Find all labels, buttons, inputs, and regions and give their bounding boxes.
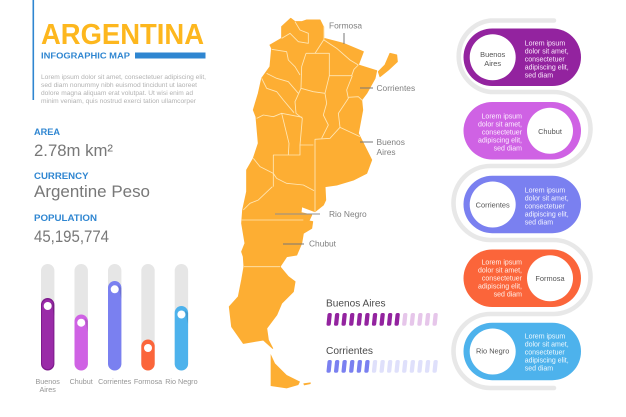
map labels: Chubut [309, 238, 337, 248]
panel: Formosa: Lorem ipsum [482, 260, 522, 266]
panel: Rio Negro: consectetuer [525, 350, 565, 356]
intro paragraph [41, 74, 206, 105]
bar chart [36, 264, 198, 394]
panel: Formosa: Formosa [535, 274, 565, 283]
panel: Formosa: sed diam [494, 292, 522, 298]
bar labels: Aires [40, 385, 56, 394]
bar: Chubut [74, 264, 88, 370]
subtitle bar [135, 52, 206, 58]
bar labels [36, 377, 198, 394]
panel: Chubut: Chubut [538, 127, 562, 136]
currency: Argentine Peso [34, 183, 150, 201]
panel: Formosa: adipiscing elit, [478, 284, 522, 290]
serpentine track [454, 20, 590, 388]
panel: Corrientes: adipiscing elit, [525, 212, 569, 218]
panel: Chubut: sed diam [494, 146, 522, 152]
intro paragraph: Lorem ipsum dolor sit amet, consectetuer adipiscing elit, [41, 74, 206, 81]
map: Tierra del Fuego [271, 354, 300, 388]
bar: Buenos Aires [41, 264, 54, 370]
map mainland [229, 18, 377, 348]
subtitle: INFOGRAPHIC MAP [41, 50, 130, 60]
panel: Corrientes: Corrientes [476, 200, 510, 210]
population: POPULATION [34, 213, 97, 223]
map labels: Buenos [376, 137, 405, 147]
population: 45,195,774 [34, 228, 109, 246]
map labels [309, 20, 415, 248]
area: AREA [34, 127, 60, 137]
panel: Buenos Aires: consectetuer [525, 56, 565, 64]
bar labels: Corrientes [98, 377, 132, 386]
map labels: Corrientes [376, 83, 415, 93]
panel: Rio Negro [464, 323, 581, 380]
map of Argentina [229, 18, 397, 388]
pictogram: Corrientes [326, 346, 438, 373]
panel: Rio Negro: sed diam [525, 366, 553, 372]
intro paragraph: sed diam nonummy nibh euismod tincidunt ut laoreet [41, 82, 197, 89]
panel: Rio Negro: Rio Negro [476, 346, 509, 356]
pictogram: Buenos Aires: Buenos Aires [326, 298, 386, 310]
area [34, 127, 114, 160]
panel: Buenos Aires: Aires [484, 59, 501, 68]
panel: Corrientes: dolor sit amet, [525, 196, 569, 202]
currency: CURRENCY [34, 171, 88, 181]
header block [32, 0, 206, 105]
bar labels: Formosa [134, 377, 162, 386]
pictogram: Buenos Aires [326, 298, 438, 326]
map labels: Rio Negro [329, 209, 367, 219]
map leader lines [275, 33, 373, 244]
title: ARGENTINA [41, 19, 204, 51]
panel: Buenos Aires: dolor sit amet, [525, 48, 569, 56]
panel: Buenos Aires: Buenos [480, 50, 506, 59]
panel: Chubut: consectetuer [482, 130, 523, 136]
panel: Formosa: dolor sit amet, [478, 268, 522, 274]
intro paragraph: minim veniam, quis nostrud exerci tation ullamcorper [41, 98, 196, 105]
panel: Buenos Aires: adipiscing elit, [525, 64, 569, 72]
province borders [242, 22, 363, 267]
map labels: Formosa [329, 20, 362, 30]
panel: Corrientes: Lorem ipsum [525, 188, 565, 194]
panel: Rio Negro: dolor sit amet, [525, 342, 569, 348]
map: Isla de los Estados [303, 382, 311, 385]
currency [34, 171, 150, 201]
key facts [34, 127, 150, 246]
panel: Rio Negro: Lorem ipsum [525, 334, 565, 340]
panel: Buenos Aires: Lorem ipsum [525, 40, 565, 48]
panel: Corrientes [464, 176, 581, 233]
panel: Corrientes: consectetuer [525, 204, 565, 210]
map labels: Aires [376, 147, 396, 157]
panel: Corrientes: sed diam [525, 220, 553, 226]
map: Misiones [378, 53, 397, 77]
panel: Chubut: Lorem ipsum [482, 114, 522, 120]
population [34, 213, 109, 246]
pictogram: Corrientes: Corrientes [326, 346, 373, 357]
panel: Rio Negro: adipiscing elit, [525, 358, 569, 364]
panel: Buenos Aires [464, 28, 581, 86]
intro paragraph: dolore magna aliquam erat volutpat. Ut wisi enim ad [41, 90, 194, 97]
panel: Formosa [464, 250, 581, 307]
panel: Chubut: adipiscing elit, [478, 138, 522, 144]
panel: Chubut: dolor sit amet, [478, 122, 522, 128]
panel: Formosa: consectetuer [482, 276, 523, 282]
bar: Corrientes [108, 264, 121, 370]
bar labels: Buenos [36, 377, 60, 386]
area: 2.78m km² [34, 142, 114, 160]
panel: Chubut [464, 102, 581, 160]
bar labels: Rio Negro [165, 377, 198, 386]
bar: Rio Negro [175, 264, 188, 370]
panel: Buenos Aires: sed diam [525, 72, 553, 80]
bar labels: Chubut [70, 377, 93, 386]
bar: Formosa [141, 264, 155, 370]
